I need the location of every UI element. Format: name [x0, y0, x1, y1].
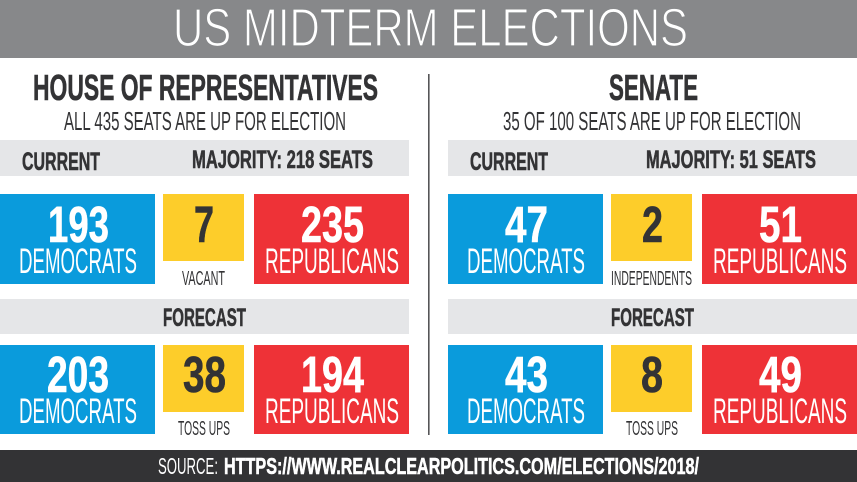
source footer: SOURCE: — [158, 453, 218, 479]
panel: house of representatives — [0, 67, 409, 440]
current republicans: house: 235 — [301, 196, 364, 253]
current democrats: senate — [448, 194, 603, 284]
current vacant: house: 7 — [194, 196, 214, 253]
source footer — [0, 450, 857, 482]
forecast toss ups: senate — [611, 345, 692, 440]
current republicans: house: REPUBLICANS — [265, 242, 399, 281]
current republicans: senate — [702, 194, 857, 284]
current bar: senate — [448, 140, 857, 176]
current republicans: senate: 51 — [759, 196, 802, 253]
forecast democrats: senate — [448, 345, 603, 434]
forecast toss ups: house: TOSS UPS — [178, 418, 230, 440]
current democrats: house: 193 — [48, 196, 109, 253]
heading: senate: SENATE — [609, 67, 698, 108]
forecast republicans: house: REPUBLICANS — [265, 392, 399, 431]
current democrats: house: DEMOCRATS — [19, 242, 137, 281]
current bar: house: CURRENT — [22, 148, 100, 176]
current independents: senate: INDEPENDENTS — [611, 268, 692, 290]
forecast toss ups: house — [163, 345, 244, 440]
forecast bar: senate — [448, 299, 857, 334]
forecast democrats: senate: DEMOCRATS — [467, 392, 585, 431]
current vacant: house: VACANT — [182, 268, 225, 290]
forecast democrats: house: 203 — [47, 346, 109, 403]
forecast republicans: senate — [702, 345, 857, 434]
forecast republicans: senate: 49 — [759, 346, 802, 403]
current democrats: senate: 47 — [505, 196, 548, 253]
current independents: senate: 2 — [642, 196, 663, 253]
current vacant: house — [163, 194, 244, 290]
heading: house: HOUSE OF REPRESENTATIVES — [33, 67, 378, 108]
forecast toss ups: senate: 8 — [641, 346, 663, 403]
forecast toss ups: house: 38 — [183, 346, 226, 403]
forecast bar: house — [0, 299, 409, 334]
forecast bar: senate: FORECAST — [611, 304, 694, 332]
panel: senate — [448, 67, 857, 440]
current bar: house — [0, 140, 409, 176]
current democrats: senate: DEMOCRATS — [467, 242, 585, 281]
forecast republicans: house — [254, 345, 409, 434]
title banner — [0, 0, 857, 58]
forecast bar: house: FORECAST — [163, 304, 246, 332]
subheading: house: ALL 435 SEATS ARE UP FOR ELECTION — [64, 106, 346, 136]
current republicans: house — [254, 194, 409, 284]
forecast democrats: senate: 43 — [505, 346, 548, 403]
forecast toss ups: senate: TOSS UPS — [626, 418, 678, 440]
current bar: house: MAJORITY: 218 SEATS — [192, 146, 373, 174]
forecast democrats: house: DEMOCRATS — [19, 392, 137, 431]
current bar: senate: CURRENT — [470, 148, 548, 176]
current democrats: house — [0, 194, 155, 284]
centre divider — [428, 74, 430, 435]
current independents: senate — [611, 194, 692, 290]
forecast democrats: house — [0, 345, 155, 434]
forecast republicans: house: 194 — [301, 346, 364, 403]
